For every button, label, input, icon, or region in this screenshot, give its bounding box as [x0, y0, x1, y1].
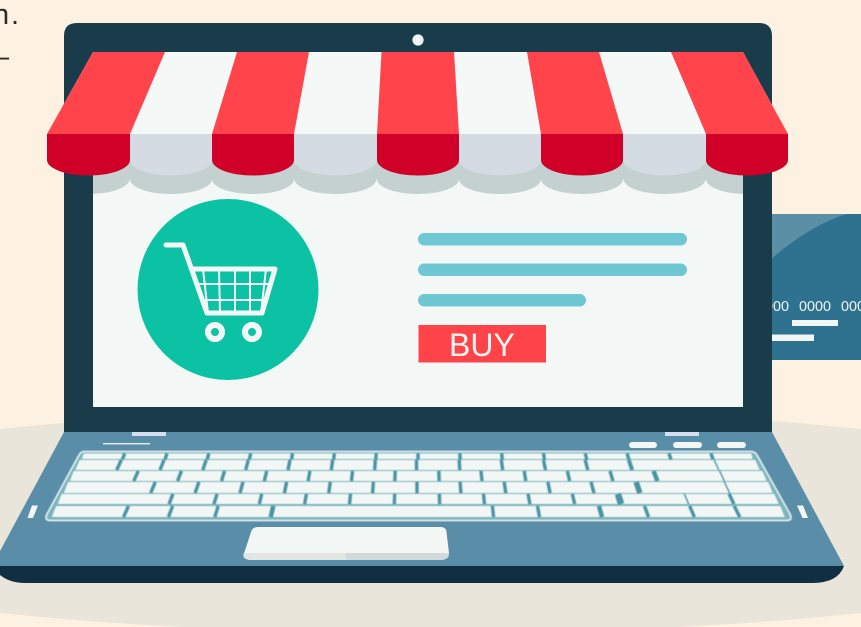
credit card	[740, 214, 861, 360]
awning valance	[47, 134, 788, 176]
cropped text fragment	[0, 0, 19, 73]
buy button: BUY	[449, 327, 515, 363]
awning	[47, 52, 788, 176]
function buttons	[629, 442, 746, 448]
laptop base	[0, 432, 844, 583]
green cart badge	[138, 199, 318, 380]
awning roof stripes	[47, 52, 788, 134]
key rows	[52, 454, 784, 516]
awning shadow	[93, 160, 743, 194]
speaker line	[103, 443, 150, 444]
keyboard	[46, 452, 791, 520]
trackpad	[243, 527, 449, 560]
cart icon	[166, 245, 275, 339]
screen	[93, 52, 743, 407]
hinge marks	[132, 432, 699, 436]
floor ellipse	[0, 408, 861, 627]
buy button	[418, 325, 546, 363]
camera	[412, 34, 424, 46]
key gaps	[117, 454, 740, 517]
product text lines	[418, 233, 687, 306]
laptop lid bezel	[64, 23, 772, 432]
side marks	[28, 506, 808, 518]
